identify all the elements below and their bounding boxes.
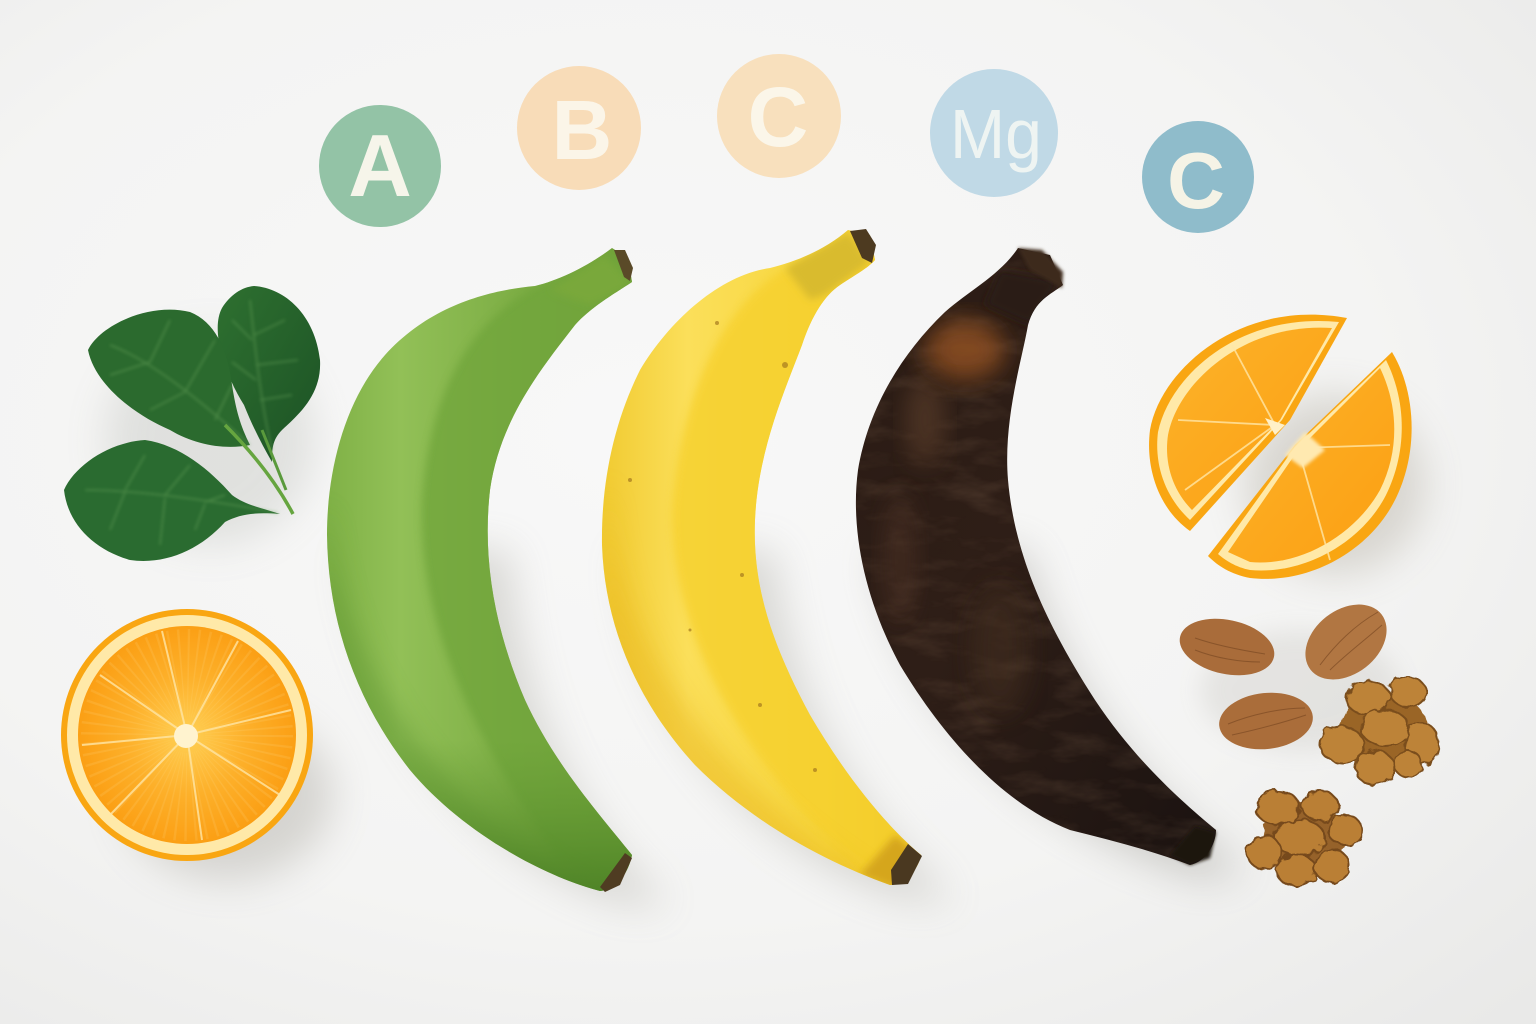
blossom tip: [1170, 826, 1216, 865]
walnuts: [1247, 677, 1439, 886]
walnut upper: [1320, 677, 1439, 785]
orange wedges: [1149, 315, 1425, 579]
almond 3: [1216, 688, 1316, 754]
badge: vitamin C blue: [1142, 121, 1254, 233]
badge: magnesium: [930, 69, 1058, 197]
badge: vitamin B: [517, 66, 641, 190]
badge: vitamin B: B: [552, 83, 612, 177]
blossom tip: [600, 853, 632, 892]
badge: magnesium: Mg: [950, 95, 1042, 173]
leaf: lower: [64, 440, 280, 561]
segment membranes: [82, 631, 291, 840]
juice vesicles: [125, 673, 249, 797]
yellow banana: [595, 225, 955, 900]
brown patches: [925, 320, 1005, 380]
badge: vitamin C blue: C: [1167, 136, 1225, 225]
wedge: upper: [1149, 315, 1347, 531]
almond 1: [1174, 611, 1280, 683]
walnut lower: [1247, 791, 1362, 886]
wedge: lower: [1208, 352, 1412, 579]
green banana: [320, 240, 670, 905]
freckles: [628, 321, 817, 772]
badge: vitamin A: A: [348, 116, 412, 215]
almond 2: [1291, 589, 1401, 695]
mottled peel: [850, 240, 1220, 870]
vitamin badges: [319, 54, 1254, 233]
badge: vitamin A: [319, 105, 441, 227]
leaf: upper right: [218, 286, 320, 490]
badge: vitamin C: [717, 54, 841, 178]
stem tip: [614, 250, 633, 281]
spinach leaves: [64, 286, 320, 561]
leaf: upper left: [88, 310, 293, 514]
ridge shading: [422, 240, 640, 900]
almonds: [1174, 589, 1401, 754]
blossom tip: [891, 844, 922, 885]
stem tip: [1018, 248, 1063, 288]
badge: vitamin C: C: [748, 70, 808, 164]
overripe banana: [850, 240, 1246, 880]
stem tip: [850, 229, 876, 263]
orange half: [61, 609, 333, 880]
